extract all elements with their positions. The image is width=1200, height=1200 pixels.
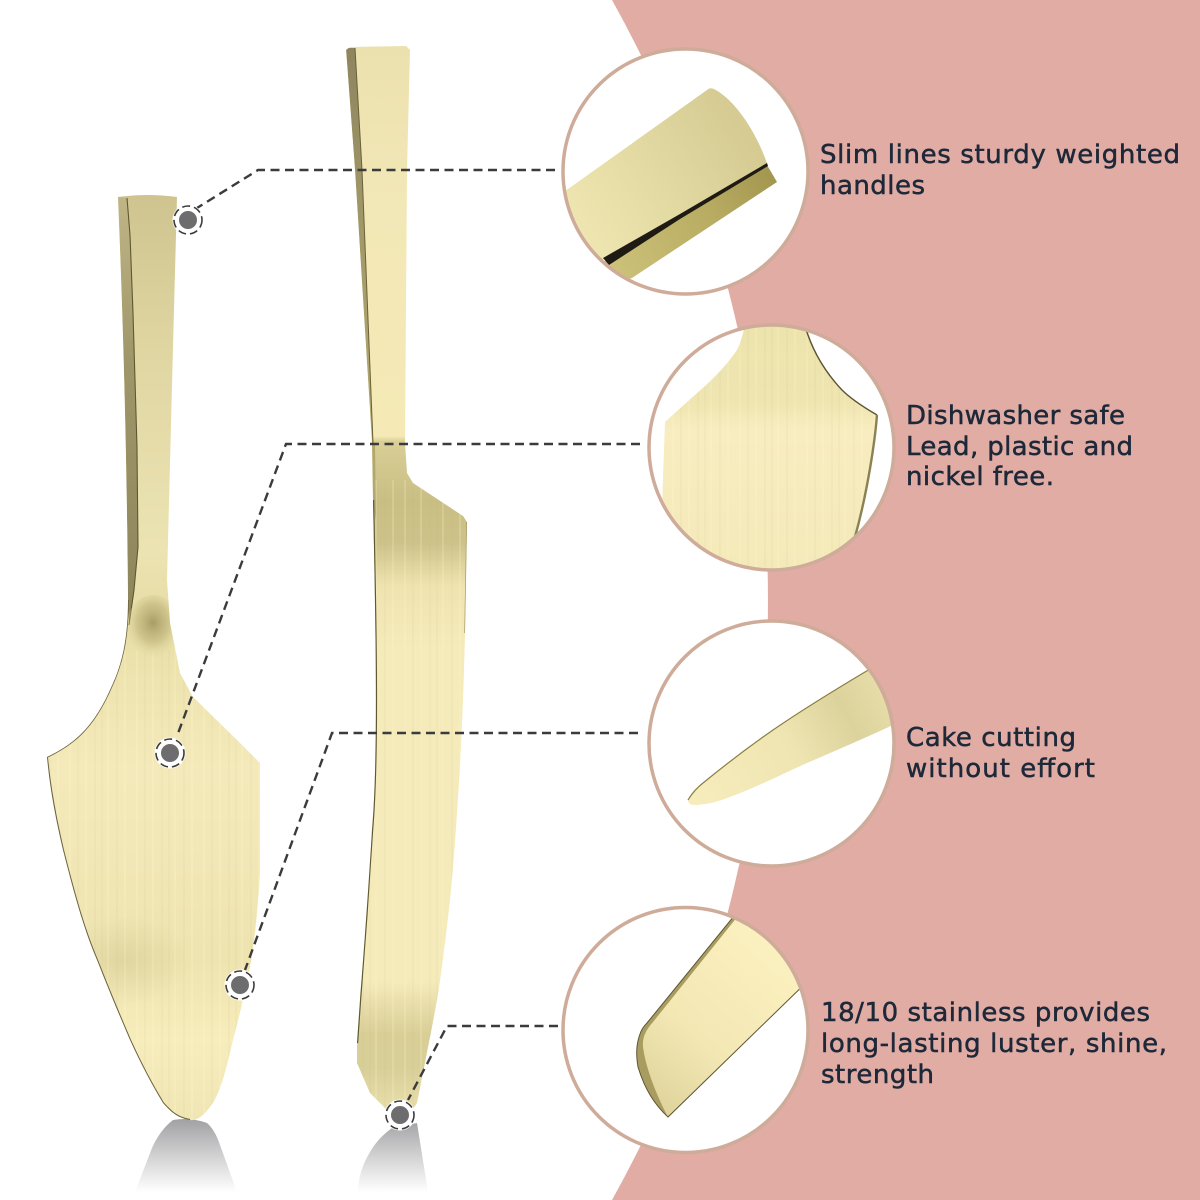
detail circle: handle bbox=[550, 49, 808, 294]
detail circle: tip bbox=[561, 906, 810, 1154]
caption: dishwasher safe: Lead, plastic and bbox=[906, 432, 1133, 462]
caption: dishwasher safe: Dishwasher safe bbox=[906, 401, 1125, 431]
caption: cake cutting: without effort bbox=[906, 754, 1095, 784]
caption: stainless: 18/10 stainless provides bbox=[821, 998, 1150, 1028]
caption: handles: handles bbox=[820, 171, 925, 201]
caption: handles bbox=[820, 140, 1180, 201]
cake knife reflection bbox=[358, 1123, 428, 1192]
background: pink arc panel bbox=[612, 0, 1200, 1200]
caption: stainless: strength bbox=[821, 1060, 934, 1090]
caption: stainless: long-lasting luster, shine, bbox=[821, 1029, 1167, 1059]
marker dot: server edge bbox=[224, 970, 256, 1000]
marker dot: handle bbox=[172, 204, 204, 236]
caption: handles: Slim lines sturdy weighted bbox=[820, 140, 1180, 170]
detail circle: dishwasher safe bbox=[649, 320, 894, 580]
caption: cake cutting: Cake cutting bbox=[906, 723, 1076, 753]
caption: stainless bbox=[821, 998, 1167, 1090]
caption: cake cutting bbox=[906, 723, 1095, 784]
marker dot: server blade bbox=[154, 738, 186, 768]
marker dot: knife tip bbox=[384, 1100, 416, 1130]
caption: dishwasher safe: nickel free. bbox=[906, 462, 1054, 492]
cake server bbox=[40, 195, 270, 1130]
caption: dishwasher safe bbox=[906, 401, 1133, 492]
leader lines bbox=[177, 170, 640, 1100]
cake server reflection bbox=[135, 1119, 237, 1192]
cake knife bbox=[346, 46, 467, 1109]
detail circle: blade edge bbox=[649, 621, 900, 866]
